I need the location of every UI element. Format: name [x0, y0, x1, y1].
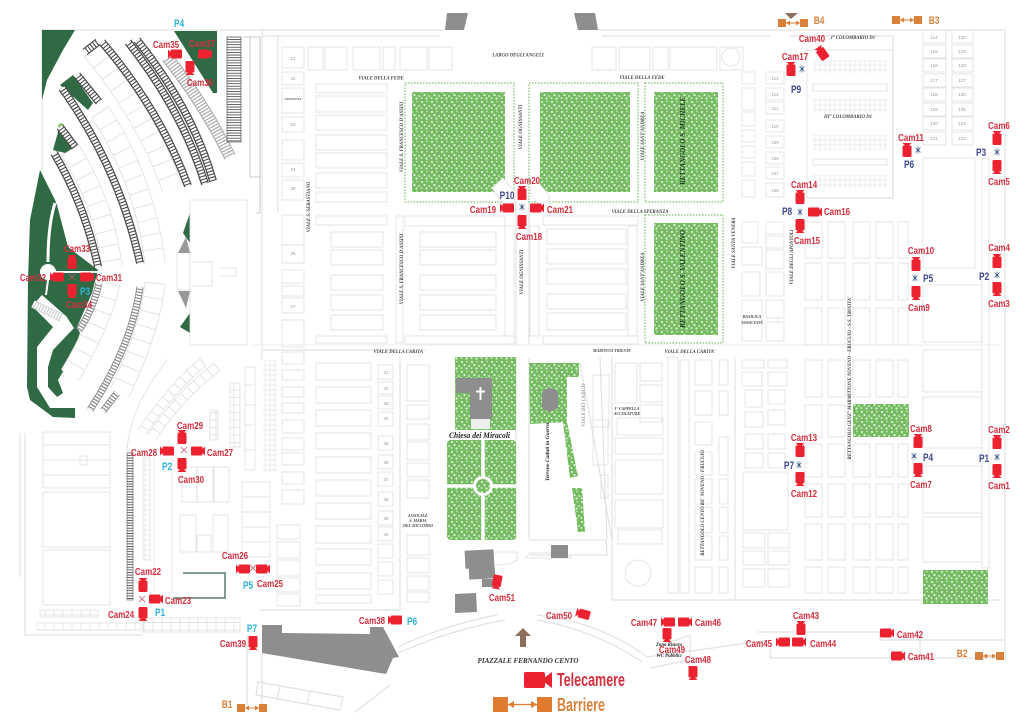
panel: curved plot rings	[70, 50, 217, 437]
labels: plot numbers: 119	[930, 107, 938, 112]
labels: street names: VIALE OGNISSANTI	[520, 250, 525, 294]
labels: street names: I° CAPPELLA	[614, 406, 640, 411]
panel: hatched columns	[127, 37, 277, 600]
labels: plot numbers: 107	[771, 171, 779, 176]
labels: street names: LARGO DEGLI ANGELI	[491, 54, 544, 58]
labels: plot numbers: 31	[383, 370, 389, 375]
camera: Cam38	[359, 615, 402, 626]
camera: Cam49: Cam49	[659, 644, 685, 655]
camera: Cam46	[678, 617, 721, 628]
barrier: B1: B1	[222, 699, 233, 711]
panel: paths through green area	[32, 203, 98, 408]
camera: Cam47	[631, 617, 675, 628]
camera: Cam13	[791, 432, 817, 457]
camera: Cam28: Cam28	[131, 447, 157, 458]
labels: street names: COLONNA	[285, 97, 302, 101]
panel: gray buildings	[262, 545, 568, 674]
camera: Cam27: Cam27	[207, 447, 233, 458]
camera: Cam4: Cam4	[988, 242, 1011, 253]
camera: Cam29	[177, 420, 203, 444]
panel: church garden	[447, 357, 585, 540]
labels: street names: VIALE DEI CADUTI	[582, 383, 587, 427]
labels: plot numbers: 40	[383, 532, 389, 537]
camera: Cam10	[908, 245, 934, 271]
labels: plot numbers: 27	[290, 304, 296, 309]
camera: Cam10: Cam10	[908, 245, 934, 256]
camera: Cam1: Cam1	[988, 480, 1010, 491]
legend: Barriere	[493, 695, 605, 715]
camera: Cam39	[220, 636, 258, 650]
pole markers east: P2	[979, 271, 990, 283]
camera: Cam9	[908, 286, 930, 313]
camera: Cam45	[746, 638, 790, 649]
panel: column of numbered plots left	[277, 47, 743, 606]
label: restaurant area: Zona Ristoro	[655, 643, 683, 648]
labels: plot numbers: 111	[772, 106, 779, 111]
labels: street names: BASILICA	[742, 314, 762, 319]
camera: Cam4	[988, 242, 1011, 268]
barrier: B2	[957, 648, 1004, 660]
legend: Barriere: Barriere	[557, 695, 605, 715]
labels: plot numbers: 35	[383, 441, 389, 446]
labels: plot numbers: 112	[771, 92, 779, 97]
camera: Cam22: Cam22	[135, 566, 161, 577]
pole markers west: P4	[174, 18, 185, 30]
camera: Cam20	[514, 175, 540, 200]
camera: Cam37: Cam37	[189, 38, 215, 49]
pole markers east: P8	[782, 206, 793, 218]
camera: Cam8: Cam8	[910, 423, 932, 434]
labels: plot numbers: 24	[290, 167, 296, 172]
icon: green frame	[173, 573, 225, 598]
labels: plot numbers: 108	[771, 156, 779, 161]
labels: street names: VIALE S. FRANCESCO D'ASSISI	[400, 234, 405, 304]
camera: Cam17: Cam17	[782, 51, 808, 62]
camera: Cam14: Cam14	[791, 179, 818, 190]
labels: street names	[285, 36, 875, 556]
labels: street names: VIALE DELLA SPERANZA	[611, 210, 669, 215]
labels: plot numbers: 115	[930, 49, 938, 54]
camera: Cam24	[108, 607, 148, 621]
labels: street names: I° COLOMBARIO D1	[830, 36, 875, 41]
arrow: top entrance	[785, 13, 798, 19]
camera: Cam28	[131, 446, 174, 458]
panel: dark green areas	[27, 30, 217, 418]
legend: Telecamere: Telecamere	[557, 670, 625, 690]
camera: Cam32: Cam32	[20, 272, 46, 283]
labels: street names: VIALE SANT'ANDREA	[641, 112, 646, 160]
labels: street names: RETTANGOLO GENZ° MARMITTONE NOVENO - FRUCUIO - S.S. TRINITA'	[848, 296, 853, 459]
panel: intersection corners	[492, 178, 550, 203]
labels: street names: VIALE S. FRANCESCO D'ASSISI	[400, 102, 405, 172]
labels: plot numbers: 25	[290, 186, 296, 191]
panel: lower central plots	[316, 363, 371, 603]
camera: Cam43	[793, 610, 819, 635]
camera: Cam36	[186, 61, 213, 88]
barrier: B3: B3	[929, 15, 940, 27]
panel: green rectangles with frames	[405, 83, 988, 604]
camera: Cam6: Cam6	[988, 120, 1010, 131]
camera: Cam30	[178, 458, 204, 485]
label: square name: PIAZZALE FERNANDO CENTO	[478, 656, 579, 665]
camera: Cam25	[256, 564, 283, 589]
labels: street names: ACCOLATURE	[613, 411, 641, 416]
camera: Cam2	[988, 424, 1010, 449]
labels: plot numbers: 23	[290, 122, 296, 127]
labels: plot numbers	[290, 35, 966, 537]
camera: Cam40	[799, 33, 830, 61]
label: church name: Chiesa dei Miracoli	[449, 430, 511, 440]
panel: small gray triangles	[178, 237, 190, 308]
pole markers west	[69, 18, 418, 635]
camera: Cam7: Cam7	[910, 479, 932, 490]
labels: plot numbers: 21	[290, 56, 296, 61]
pole markers east: P3	[976, 147, 987, 159]
camera: Cam3	[988, 282, 1010, 309]
camera: Cam5	[988, 160, 1010, 187]
panel: hatched curved strips	[54, 40, 230, 411]
labels: plot numbers: 38	[383, 497, 389, 502]
labels: street names: VIALE S. SEBASTIANO	[307, 181, 312, 232]
labels: plot numbers: 37	[383, 477, 389, 482]
labels: street names: RETTANGOLO CENTO RE' NOVENO - FRUCUIO	[701, 450, 706, 556]
labels: street names: ASSOCIAZ.	[407, 513, 428, 518]
camera: Cam16	[808, 206, 850, 217]
labels: rectangle names	[679, 97, 687, 329]
camera: Cam35: Cam35	[153, 39, 179, 50]
camera: Cam38: Cam38	[359, 615, 385, 626]
camera: Cam35	[153, 39, 182, 58]
camera: Cam19: Cam19	[470, 204, 496, 215]
labels: plot numbers: 124	[958, 121, 966, 126]
camera: Cam23	[149, 594, 191, 606]
camera: Cam7	[910, 463, 932, 490]
labels: plot numbers: 22	[290, 76, 296, 81]
camera: Cam49	[659, 628, 685, 655]
camera: Cam25: Cam25	[257, 578, 283, 589]
camera: Cam41	[891, 651, 934, 662]
labels: street names: DEL SOCCORSO	[402, 523, 433, 528]
labels: street names: S. MARIA	[409, 518, 427, 523]
labels: plot numbers: 120	[930, 121, 938, 126]
pole markers west: P5	[243, 580, 254, 592]
panel: empty rectangular plots east	[742, 30, 989, 587]
barrier: B2: B2	[957, 648, 968, 660]
labels: rectangle names: RETTANGOLO S. MICHELE	[679, 97, 687, 186]
pole markers west: P7	[247, 623, 257, 635]
panel: gate buildings	[445, 13, 598, 30]
camera: Cam48	[685, 654, 711, 680]
pole markers east: P6	[904, 159, 915, 171]
labels: plot numbers: 116	[930, 63, 938, 68]
pole markers east	[500, 66, 1000, 472]
camera: Cam15: Cam15	[794, 235, 820, 246]
labels: plot numbers: 113	[771, 76, 779, 81]
camera: Cam13: Cam13	[791, 432, 817, 443]
icon: small light green circle	[58, 123, 64, 129]
labels: plot numbers: 121	[930, 136, 938, 141]
camera: Cam22	[135, 566, 161, 592]
labels: street names: ASSOCIATA	[740, 320, 763, 325]
labels: street names: MADONNA TRIESTE	[592, 348, 631, 353]
labels: street names: VIALE DELLA CARITA'	[665, 350, 716, 355]
barrier: B1	[222, 699, 267, 712]
camera: Cam23: Cam23	[165, 595, 191, 606]
barrier: B4: B4	[814, 15, 825, 27]
camera: Cam32	[20, 272, 64, 283]
camera: Cam20: Cam20	[514, 175, 540, 186]
camera: Cam18: Cam18	[516, 231, 542, 242]
pole markers east: P10	[500, 190, 515, 202]
camera: Cam16: Cam16	[824, 206, 850, 217]
camera: Cam3: Cam3	[988, 298, 1010, 309]
labels: plot numbers: 125	[958, 107, 966, 112]
camera: Cam33: Cam33	[64, 243, 90, 254]
camera: Cam11: Cam11	[898, 132, 924, 143]
pole markers east: P1	[979, 453, 990, 465]
labels: street names: III° COLOMBARIO D1	[823, 115, 872, 120]
camera: Cam8	[910, 423, 932, 448]
camera: Cam45: Cam45	[746, 638, 772, 649]
camera: Cam15	[794, 219, 820, 246]
camera: Cam44	[792, 638, 837, 649]
label: restaurant area: WC Pubblici	[656, 654, 682, 659]
labels: plot numbers: 123	[958, 136, 966, 141]
labels: plot numbers: 34	[383, 416, 389, 421]
barrier: B3	[892, 15, 940, 27]
labels: plot numbers: 26	[290, 251, 296, 256]
labels: plot numbers: 33	[383, 401, 389, 406]
barrier: B4	[778, 15, 825, 27]
camera: Cam46: Cam46	[695, 617, 721, 628]
label: restaurant area	[655, 643, 683, 659]
labels: street names: VIALE SANTA VENERA	[732, 217, 737, 269]
labels: street names: VIALE SANT'ANDREA	[641, 253, 646, 301]
pole markers east: P4	[923, 452, 934, 464]
pole markers west: P1	[155, 607, 166, 619]
labels: street names: VIALE DEGLI APOSTOLI	[790, 229, 795, 284]
labels: street names: VIALE DELLA CARITA'	[374, 350, 425, 355]
camera: Cam36: Cam36	[187, 77, 213, 88]
labels: rectangle names: RETTANGOLO S. VALENTINO	[679, 230, 687, 329]
camera: Cam5: Cam5	[988, 176, 1010, 187]
camera: Cam1	[988, 464, 1010, 491]
camera: Cam39: Cam39	[220, 638, 246, 649]
arrow: entrance	[515, 628, 531, 647]
labels: plot numbers: 109	[771, 140, 779, 145]
pole markers west: P6	[407, 616, 418, 628]
camera: Cam29: Cam29	[177, 420, 203, 431]
labels: street names: VIALE DELLA FEDE	[358, 76, 404, 82]
labels: plot numbers: 110	[771, 124, 779, 129]
legend: Telecamere	[524, 670, 625, 690]
camera: Cam31: Cam31	[96, 272, 122, 283]
labels: plot numbers: 128	[958, 63, 966, 68]
camera: Cam30: Cam30	[178, 474, 204, 485]
camera: Cam19	[470, 204, 514, 215]
camera: Cam27	[191, 446, 233, 458]
panel: plots beside church	[378, 363, 663, 602]
camera: Cam47: Cam47	[631, 617, 657, 628]
camera: Cam12	[791, 472, 817, 499]
camera: Cam14	[791, 179, 818, 204]
camera: Cam50	[546, 608, 591, 621]
pole markers east: P5	[923, 273, 934, 285]
labels: plot numbers: 130	[958, 35, 966, 40]
camera: Cam9: Cam9	[908, 302, 930, 313]
labels: plot numbers: 39	[383, 516, 389, 521]
camera: Cam21	[530, 204, 573, 215]
camera: Cam12: Cam12	[791, 488, 817, 499]
camera: Cam42	[880, 628, 923, 640]
labels: street names: VIALE DELLA FEDE	[619, 76, 665, 81]
labels: street names: VIALE OGNISSANTI	[519, 105, 524, 149]
pole markers east: P7	[784, 460, 794, 472]
panel: colombari	[807, 50, 893, 198]
camera: Cam34: Cam34	[66, 299, 93, 310]
camera: Cam11	[898, 132, 924, 157]
panel: plots central right	[668, 357, 908, 593]
labels: plot numbers: 106	[771, 188, 779, 193]
labels: plot numbers: 126	[958, 92, 966, 97]
camera: Cam43: Cam43	[793, 610, 819, 621]
camera: Cam41: Cam41	[908, 651, 934, 662]
camera: Cam18	[516, 215, 542, 242]
camera: Cam37	[189, 38, 215, 58]
camera: Cam21: Cam21	[547, 204, 573, 215]
camera: Cam2: Cam2	[988, 424, 1010, 435]
labels: plot numbers: 118	[930, 92, 938, 97]
camera: Cam33	[64, 243, 90, 269]
camera: Cam42: Cam42	[897, 629, 923, 640]
camera: Cam6	[988, 120, 1010, 145]
camera: Cam26: Cam26	[222, 550, 248, 561]
panel: central building	[177, 37, 260, 345]
panel: grids upper left block	[316, 84, 638, 344]
camera: Cam48: Cam48	[685, 654, 711, 665]
camera: Cam44: Cam44	[810, 638, 837, 649]
panel: lower left plots	[37, 360, 270, 632]
camera: Cam51	[489, 574, 515, 603]
labels: plot numbers: 36	[383, 460, 389, 465]
pole markers east: P9	[791, 84, 802, 96]
labels: plot numbers: 127	[958, 78, 966, 83]
pole markers west: P2	[162, 461, 173, 473]
labels: plot numbers: 117	[930, 78, 938, 83]
icon: chapel	[542, 388, 558, 412]
camera: Cam51: Cam51	[489, 592, 515, 603]
camera: Cam17	[782, 51, 808, 76]
labels: plot numbers: 32	[383, 386, 389, 391]
labels: plot numbers: 114	[930, 35, 938, 40]
labels: plot numbers: 129	[958, 49, 966, 54]
pole markers west: P3	[80, 286, 91, 298]
camera: Cam40: Cam40	[799, 33, 825, 44]
label: war fallen ground: Terreno Caduti in Guerra	[545, 423, 551, 481]
camera: Cam50: Cam50	[546, 610, 572, 621]
camera: Cam31	[80, 272, 122, 283]
camera: Cam26	[222, 550, 250, 574]
camera: Cam34	[66, 284, 93, 310]
camera: Cam24: Cam24	[108, 609, 135, 620]
icon: church building	[456, 378, 492, 429]
